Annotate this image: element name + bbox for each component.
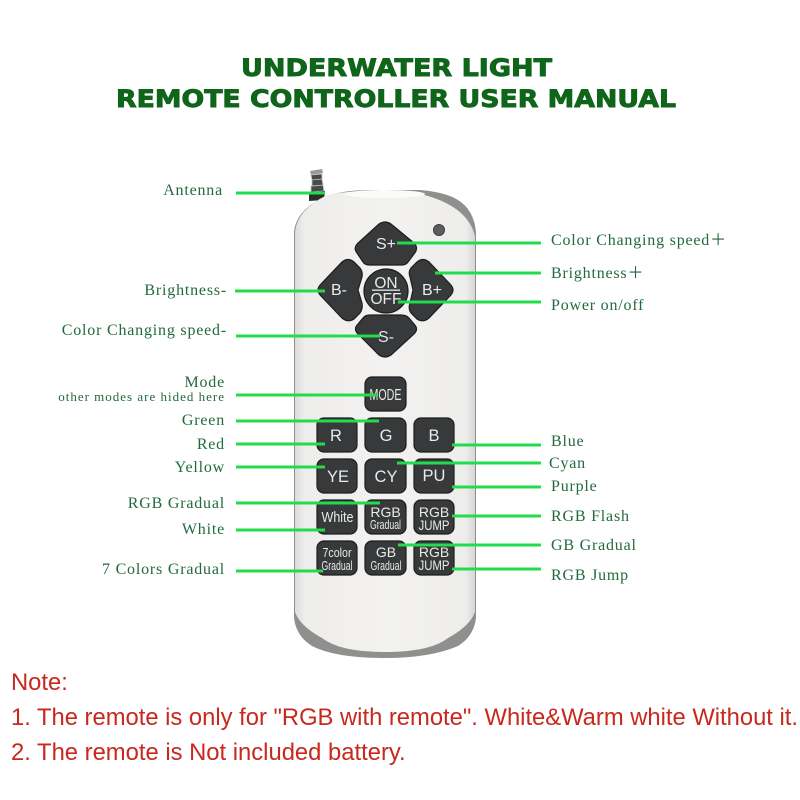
right labels (549, 232, 727, 584)
button: R: R (330, 427, 342, 445)
button: RGB JUMP top (414, 500, 454, 534)
button: YE: YE (327, 468, 349, 486)
button: 7color Gradual (317, 541, 357, 575)
right labels: Power on/off (551, 297, 644, 314)
leader lines (235, 193, 541, 571)
right labels: RGB Flash (551, 508, 630, 525)
button: RGB Gradual: RGB (370, 504, 401, 520)
remote body (295, 191, 475, 652)
button: B-: B- (331, 282, 347, 299)
left labels: Red (197, 436, 225, 453)
button: G (365, 418, 406, 452)
left labels: Color Changing speed- (62, 322, 227, 339)
button: G: G (380, 427, 392, 445)
button: RGB Gradual (365, 500, 406, 534)
button: RGB JUMP bottom: JUMP (418, 558, 450, 573)
left labels (58, 182, 227, 578)
left labels: Mode (184, 374, 225, 391)
note: 1. The remote is only for "RGB with remote". White&Warm white Without it. (11, 704, 798, 731)
button: YE (317, 459, 357, 493)
title: REMOTE CONTROLLER USER MANUAL (116, 85, 676, 113)
button: GB Gradual: GB (376, 544, 396, 560)
button: CY: CY (375, 468, 397, 486)
button: MODE (365, 377, 406, 411)
button: CY (365, 459, 406, 493)
left labels: Antenna (163, 182, 223, 199)
button: B: B (428, 427, 440, 445)
button: B+: B+ (422, 282, 442, 299)
left labels: RGB Gradual (128, 495, 225, 512)
button: B (414, 418, 454, 452)
note (11, 669, 798, 766)
note: Note: (11, 669, 68, 696)
left labels: Yellow (175, 459, 225, 476)
button: RGB JUMP bottom: RGB (419, 544, 449, 560)
button: RGB JUMP top: JUMP (418, 518, 450, 533)
remote controller (294, 169, 476, 658)
right labels: Color Changing speed＋ (551, 232, 727, 249)
button: PU: PU (423, 467, 445, 485)
right labels: RGB Jump (551, 567, 629, 584)
left labels: other modes are hided here (58, 389, 225, 404)
button: S-: S- (378, 329, 394, 346)
left labels: 7 Colors Gradual (102, 561, 225, 578)
button: White: White (322, 509, 354, 526)
right labels: Blue (551, 433, 584, 450)
right labels: Brightness＋ (551, 265, 644, 282)
indicator light (434, 224, 444, 236)
button: ON/OFF (364, 269, 408, 313)
note: 2. The remote is Not included battery. (11, 739, 406, 766)
top groove (345, 190, 425, 198)
left labels: Brightness- (144, 282, 227, 299)
right labels: Cyan (549, 455, 586, 472)
button: GB Gradual: Gradual (370, 559, 402, 573)
button: White (317, 500, 357, 534)
button: PU (414, 459, 454, 493)
button: RGB Gradual: Gradual (370, 518, 401, 532)
remote body shadow edges (294, 190, 476, 658)
button: 7color Gradual: Gradual (322, 559, 352, 573)
d-pad buttons (318, 222, 453, 357)
title (116, 54, 676, 113)
button: S+: S+ (376, 236, 396, 253)
right labels: Purple (551, 478, 598, 495)
title: UNDERWATER LIGHT (241, 54, 553, 82)
button: 7color Gradual: 7color (322, 546, 352, 560)
left labels: White (182, 521, 225, 538)
right labels: GB Gradual (551, 537, 637, 554)
button grid (317, 418, 454, 575)
button: GB Gradual (365, 541, 406, 575)
button: RGB JUMP bottom (414, 541, 454, 575)
button: MODE: MODE (370, 387, 402, 404)
button: ON/OFF: ON (374, 275, 398, 292)
button: RGB JUMP top: RGB (419, 504, 449, 520)
button: ON/OFF: OFF (370, 291, 402, 308)
antenna (309, 169, 325, 201)
left labels: Green (182, 412, 225, 429)
button: R (317, 418, 357, 452)
